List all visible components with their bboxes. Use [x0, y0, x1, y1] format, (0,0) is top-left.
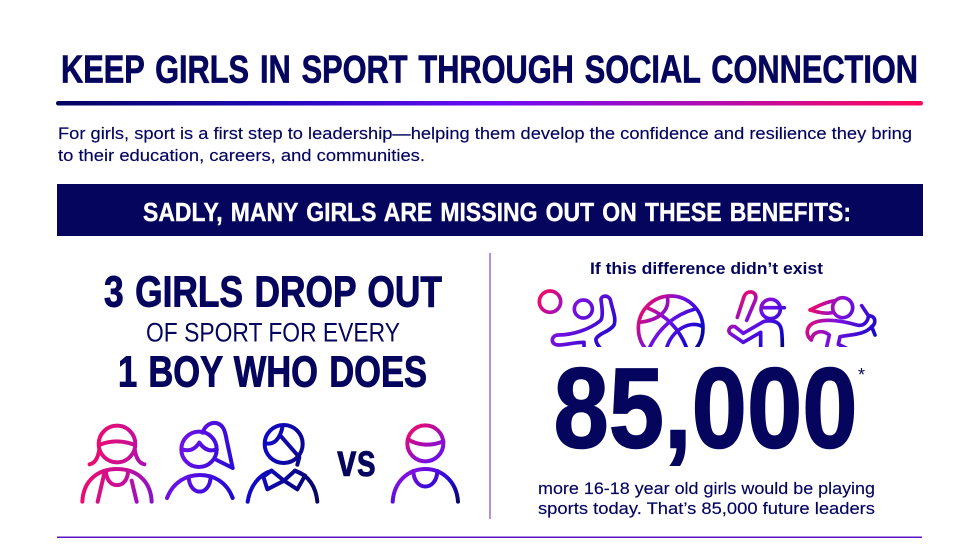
icon: boy [393, 425, 458, 502]
icon: volleyball player [539, 291, 615, 350]
icons: three girls [82, 423, 317, 502]
icon: basketball [636, 294, 705, 347]
icon: girl with hat [82, 426, 152, 502]
intro paragraph [58, 125, 912, 165]
icon: baseball batter [729, 292, 784, 350]
text: future leaders: more 16-18 year old girls would be playing [538, 479, 875, 498]
divider [489, 253, 491, 519]
panel: 85,000 statistic [538, 260, 875, 518]
asterisk: * [858, 365, 865, 385]
text: future leaders [538, 479, 875, 518]
heading: 1 boy who does: 1 BOY WHO DOES [118, 348, 427, 396]
text: if this difference did not exist: If this difference didn’t exist [590, 260, 824, 278]
icon: softball pitcher [807, 298, 875, 350]
bottom rule [57, 536, 922, 538]
big number: 85,000 [554, 346, 858, 472]
text: future leaders: sports today. That’s 85,000 future leaders [538, 499, 875, 518]
text: of sport for every: OF SPORT FOR EVERY [146, 318, 400, 348]
banner [57, 184, 923, 236]
panel: drop out statistic [104, 268, 442, 396]
icon: girl with collar [248, 425, 317, 502]
intro paragraph: For girls, sport is a first step to leadership—helping them develop the confidence and resilience they bring [58, 125, 912, 143]
text: vs: vs [337, 434, 376, 486]
intro paragraph: to their education, careers, and communities. [58, 147, 425, 165]
banner: SADLY, MANY GIRLS ARE MISSING OUT ON THESE BENEFITS: [143, 197, 851, 227]
gradient title rule [56, 101, 923, 106]
heading: 3 girls drop out: 3 GIRLS DROP OUT [104, 268, 442, 316]
icon: girl with ponytail [167, 423, 233, 498]
